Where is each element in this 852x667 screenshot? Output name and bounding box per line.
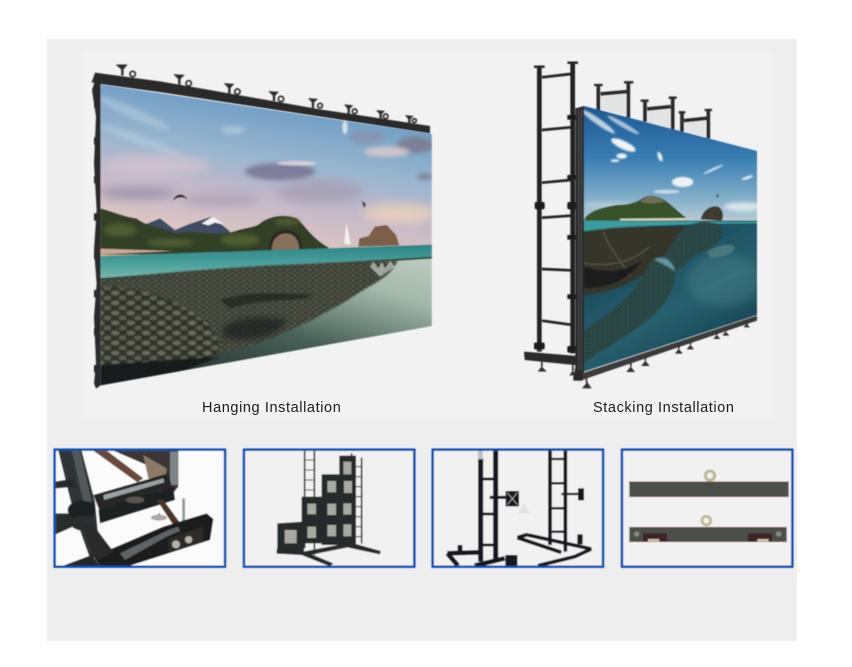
large flipper	[584, 257, 676, 363]
left ladder	[481, 451, 508, 562]
thumbnails three and four	[433, 450, 792, 567]
paraglider	[173, 194, 187, 201]
left mounting plate	[506, 491, 519, 506]
arch in hill	[268, 230, 303, 250]
panel behind	[114, 450, 179, 492]
sailboat	[344, 223, 351, 244]
thumbnail: frame clamp close-up	[55, 450, 225, 567]
LED cabinets	[277, 456, 356, 553]
large scales	[101, 287, 219, 369]
bolt	[182, 498, 185, 527]
caption: hanging installation: Hanging Installation	[202, 400, 341, 416]
rock island	[358, 225, 399, 247]
main pole	[58, 451, 100, 558]
thumbnail: hanging beams	[622, 450, 792, 567]
turtle neck and head	[667, 222, 723, 272]
left frame of hanging wall	[92, 82, 101, 389]
foot	[158, 513, 160, 520]
left base	[447, 545, 505, 566]
underwater background	[101, 257, 432, 390]
sky	[584, 103, 757, 223]
sky	[101, 83, 432, 257]
crocodile body	[100, 260, 398, 354]
underwater	[584, 221, 757, 377]
levelling feet	[538, 321, 750, 388]
mountains	[146, 216, 231, 234]
water band	[584, 221, 757, 231]
upper beam with ring	[629, 471, 789, 497]
clouds	[95, 92, 437, 223]
background panel	[47, 39, 797, 641]
snow peak	[202, 217, 224, 225]
top mounting beam	[92, 73, 430, 133]
clamp	[68, 501, 96, 519]
left lower strut	[82, 525, 113, 560]
bird	[362, 201, 366, 208]
stacking installation LED wall	[524, 63, 763, 388]
clouds	[580, 108, 763, 211]
base legs	[277, 542, 381, 566]
cabinet windows	[285, 462, 352, 543]
right base	[517, 534, 591, 566]
LED screen image: sky, island and crocodile	[95, 83, 437, 390]
lifting hooks	[116, 65, 416, 124]
side support ladder	[534, 63, 578, 353]
faint triangle mark	[518, 503, 530, 513]
front square tube	[93, 513, 213, 566]
dark lower shadow	[101, 357, 220, 387]
diagonal brown strap	[157, 500, 182, 525]
glass infill behind top ladders	[601, 94, 706, 137]
right mounting plate	[578, 488, 584, 500]
threaded rod	[93, 473, 172, 512]
wall side frame	[573, 106, 584, 381]
right ladder	[550, 451, 578, 552]
forested shore	[101, 208, 328, 255]
small flipper	[707, 245, 735, 257]
crocodile jaw and eye	[220, 293, 313, 308]
light glow	[687, 253, 760, 307]
side clamps	[534, 115, 579, 353]
sea rock	[701, 206, 723, 221]
hanging installation LED wall	[92, 65, 437, 390]
bottom beam	[581, 316, 757, 381]
horizontal beams	[56, 478, 77, 488]
rear support ladders	[594, 82, 712, 138]
ladders	[305, 451, 362, 555]
base frame	[524, 352, 584, 366]
island	[585, 196, 687, 221]
photo backdrop	[82, 50, 772, 418]
turtle shell	[584, 226, 687, 295]
LED screen image: sky, island and turtle	[580, 103, 763, 377]
thumbnails one and two	[55, 450, 414, 567]
foliage highlights	[103, 218, 300, 247]
thumbnail: twin ladder frames	[433, 450, 603, 567]
water surface band	[101, 245, 432, 279]
caption: stacking installation: Stacking Installation	[593, 400, 735, 416]
thumbnail: stacked panels on ladder frame	[244, 450, 414, 567]
bird	[716, 194, 719, 198]
lower beam with ring	[629, 516, 787, 542]
